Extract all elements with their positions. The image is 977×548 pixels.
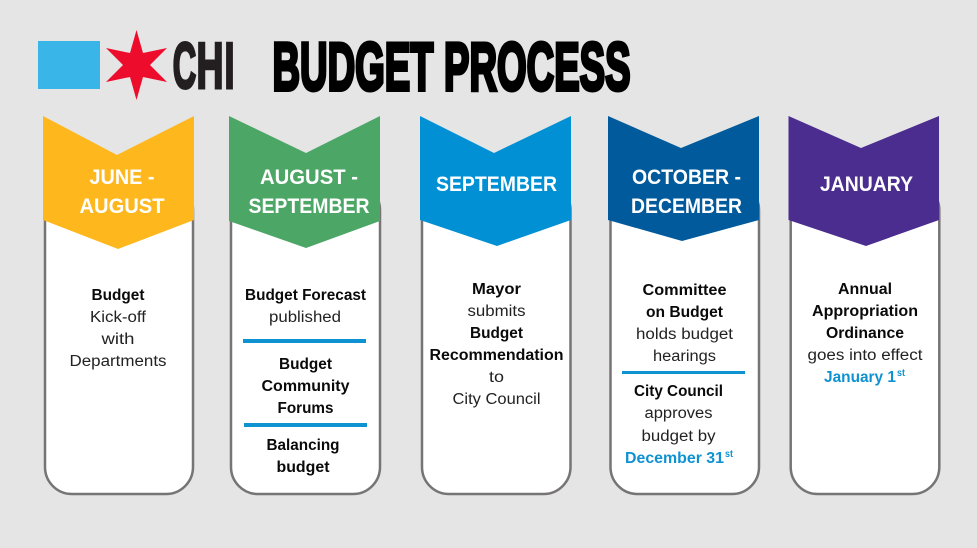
panel text: Annual bbox=[838, 281, 892, 298]
banner heading: SEPTEMBER bbox=[436, 173, 557, 196]
chevron banner bbox=[608, 116, 759, 241]
banner heading: AUGUST - bbox=[260, 166, 358, 189]
panel text: st bbox=[897, 368, 906, 379]
card body bbox=[610, 183, 759, 494]
panel text: committee: hearings bbox=[653, 348, 716, 365]
logo text: CHI: H bbox=[196, 29, 224, 102]
panel text: city council: st bbox=[725, 449, 734, 460]
panel text: city council bbox=[625, 383, 734, 467]
panel text: committee: holds budget bbox=[636, 326, 734, 343]
divider bbox=[243, 339, 366, 343]
icon: blue rectangle bbox=[38, 41, 100, 89]
panel text bbox=[808, 281, 923, 386]
panel text: forums: Community bbox=[262, 378, 350, 395]
panel text: forums: Forums bbox=[278, 400, 334, 417]
panel text: to bbox=[489, 369, 504, 386]
card body bbox=[422, 183, 570, 494]
panel: June - August bbox=[43, 116, 194, 494]
panel text: balancing: budget bbox=[276, 459, 330, 476]
divider bbox=[622, 371, 745, 374]
panel text: Departments bbox=[70, 353, 167, 370]
banner heading: AUGUST bbox=[80, 195, 165, 218]
panel text: city council: City Council bbox=[634, 383, 723, 400]
divider bbox=[244, 423, 367, 427]
icon: red six-pointed star bbox=[106, 30, 167, 100]
banner heading: JANUARY bbox=[820, 173, 913, 196]
card body bbox=[231, 183, 380, 494]
panel text: balancing bbox=[266, 437, 340, 476]
panel text: committee: on Budget bbox=[646, 304, 723, 321]
panel text: forecast: published bbox=[269, 309, 341, 326]
panel text: forums bbox=[262, 356, 350, 417]
panel text: Mayor bbox=[472, 281, 521, 298]
banner heading: OCTOBER - bbox=[632, 166, 741, 189]
panel text: balancing: Balancing bbox=[266, 437, 340, 454]
panel text: city council: approves bbox=[644, 405, 713, 422]
logo: Chicago flag mark bbox=[38, 29, 234, 102]
panel text: submits bbox=[468, 303, 526, 320]
panel text: forecast: Budget Forecast bbox=[245, 287, 366, 304]
panel: January bbox=[788, 116, 939, 494]
panel text: Recommendation bbox=[430, 347, 564, 364]
panel text: Budget bbox=[470, 325, 523, 342]
panel text: City Council bbox=[452, 391, 540, 408]
chevron banner bbox=[43, 116, 194, 249]
banner heading bbox=[248, 166, 370, 218]
panel text: Budget bbox=[92, 287, 144, 304]
banner heading: DECEMBER bbox=[631, 195, 742, 218]
title: BUDGET PROCESS bbox=[272, 29, 630, 105]
panel text: committee: Committee bbox=[642, 282, 727, 299]
chevron banner bbox=[788, 116, 939, 246]
card body bbox=[45, 183, 193, 494]
panel text: with bbox=[100, 331, 134, 348]
panel text: forecast bbox=[245, 287, 366, 326]
banner heading bbox=[631, 166, 742, 218]
logo text: CHI: C bbox=[173, 29, 196, 102]
banner heading: SEPTEMBER bbox=[248, 195, 370, 218]
panel text: Appropriation bbox=[812, 303, 918, 320]
panel: October - December bbox=[608, 116, 759, 494]
banner heading: JUNE - bbox=[90, 166, 154, 189]
panel text: forums: Budget bbox=[279, 356, 332, 373]
panel text: committee bbox=[636, 282, 734, 365]
panel text: January 1 bbox=[824, 369, 896, 386]
logo text: CHI: I bbox=[224, 29, 234, 102]
panel: August - September bbox=[229, 116, 380, 494]
panel text: city council: December 31 bbox=[625, 450, 724, 467]
chevron banner bbox=[420, 116, 571, 246]
panel text: city council: budget by bbox=[642, 428, 716, 445]
panel: September bbox=[420, 116, 571, 494]
banner heading bbox=[80, 166, 165, 218]
panel text: goes into effect bbox=[808, 347, 923, 364]
panel text: Ordinance bbox=[826, 325, 904, 342]
panel text bbox=[430, 281, 564, 408]
panel text bbox=[70, 287, 167, 370]
panel text: Kick-off bbox=[90, 309, 147, 326]
card body bbox=[791, 183, 939, 494]
chevron banner bbox=[229, 116, 380, 248]
